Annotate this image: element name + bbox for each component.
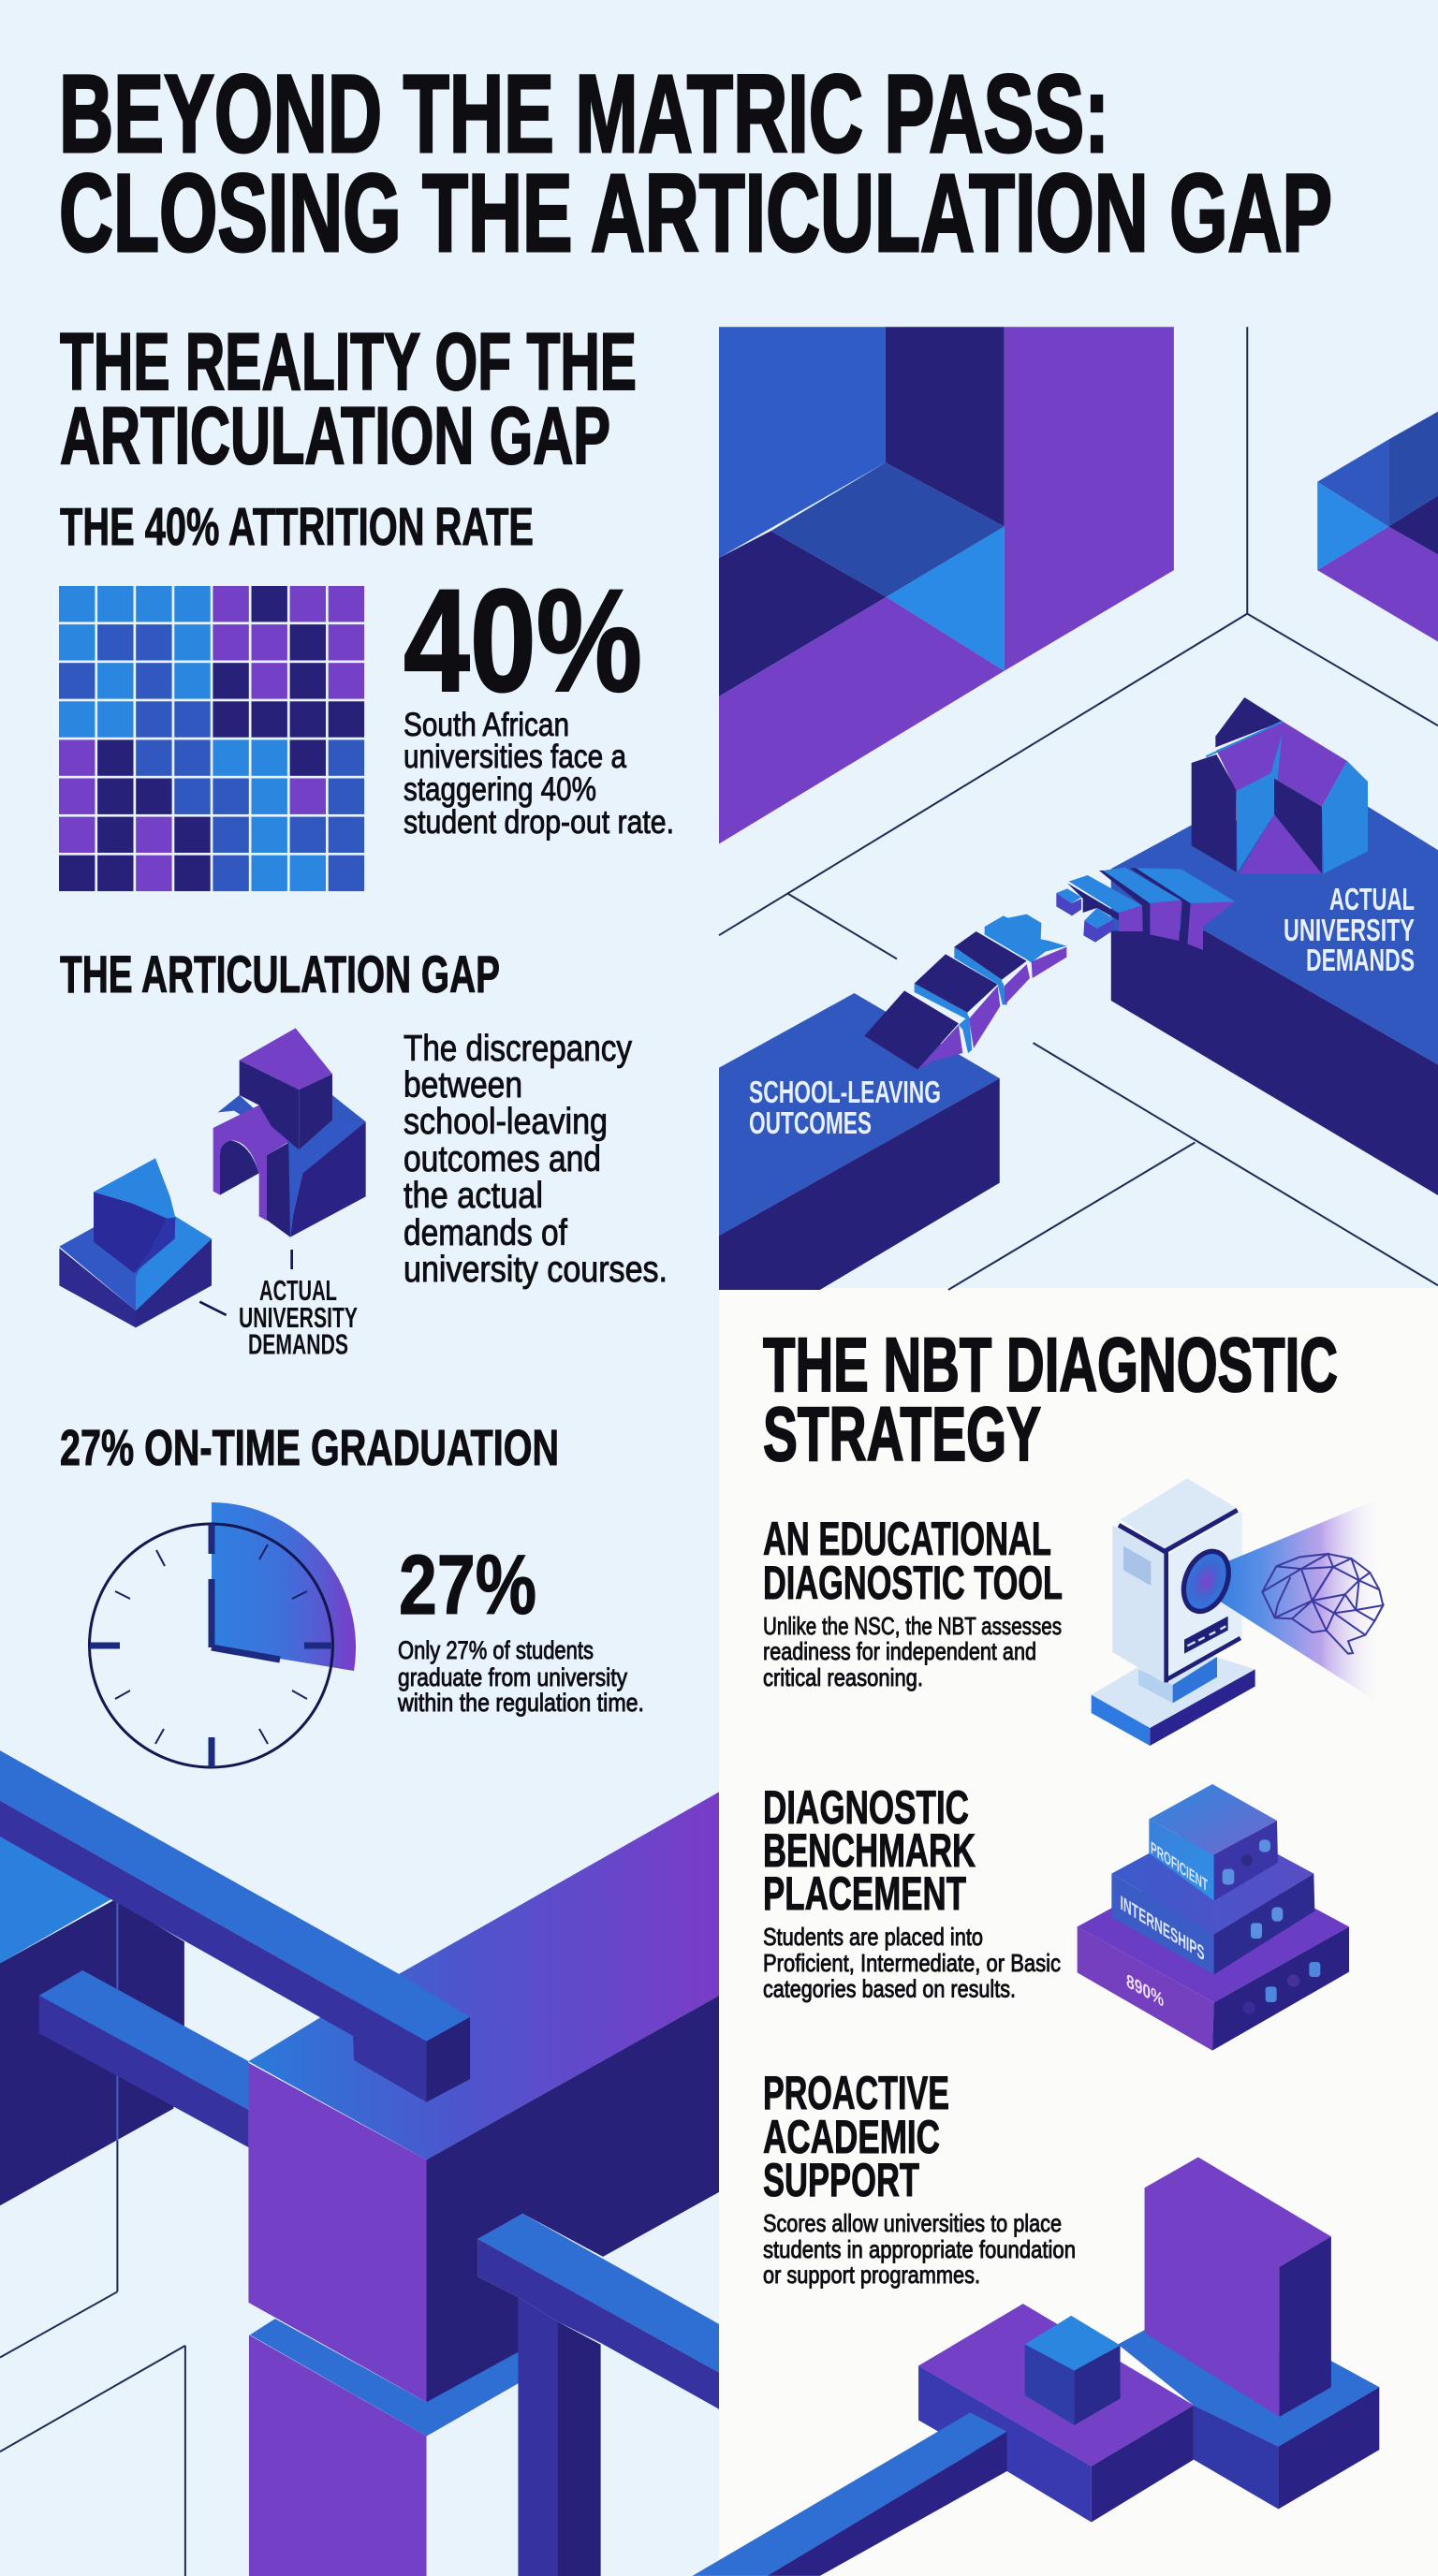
text block: 40% description: student drop-out rate. [404,804,674,841]
lens [1175,1544,1237,1617]
icon: school block [59,1158,212,1327]
icon: three tier benchmark pyramid [1078,1784,1349,2051]
broken bridge: school side [864,915,1066,1070]
text block: 27% description [397,1636,644,1717]
wedge [212,1502,356,1671]
text block: placement description: Proficient, Intermediate, or Basic [763,1949,1061,1977]
text block: NBT description: critical reasoning. [763,1663,923,1691]
clock face [90,1524,333,1767]
label: actual university demands: DEMANDS [248,1327,348,1361]
text block: placement description: Students are placed into [763,1923,983,1951]
heading: diagnostic benchmark placement: PLACEMENT [763,1867,966,1920]
illustration: isometric structure bottom left [0,1750,719,2576]
leader lines [199,1250,292,1315]
clock ticks [90,1524,332,1767]
text block: 27% description: Only 27% of students [398,1636,594,1664]
illustration: university building and broken bridge [864,697,1368,1070]
text block: 40% description [404,707,674,841]
school platform [719,993,1000,1290]
text block: 40% description: South African [404,707,569,743]
text block: 27% description: graduate from university [398,1663,627,1691]
large isometric block [719,327,1174,844]
heading: the reality of the articulation gap: ARTICULATION GAP [60,391,610,481]
beam [1214,1500,1378,1702]
broken bridge: university side [1056,868,1235,950]
text block: 40% description: universities face a [404,739,626,775]
label: actual university demands: UNIVERSITY [239,1301,358,1334]
machine base [1092,1645,1255,1746]
text block: placement description [763,1923,1061,2003]
waffle chart: 40% attrition [59,586,364,891]
text block: support description [763,2209,1076,2289]
label: actual university demands [239,1274,358,1361]
text block: discrepancy description: The discrepancy [404,1029,632,1069]
text block: NBT description [763,1612,1062,1691]
text block: discrepancy description: the actual [404,1176,543,1216]
subheading: the articulation gap: THE ARTICULATION GAP [60,944,500,1003]
text block: discrepancy description: school-leaving [404,1102,608,1142]
right edge block [1317,412,1438,642]
panel: NBT strategy background [719,1288,1438,2576]
heading: diagnostic benchmark placement: DIAGNOSTIC [763,1781,969,1834]
bottom tier [1078,1853,1349,2051]
text block: NBT description: readiness for independent and [763,1637,1036,1665]
text block: discrepancy description: outcomes and [404,1139,601,1179]
label: school-leaving outcomes: SCHOOL-LEAVING [749,1075,941,1109]
heading: diagnostic benchmark placement [763,1781,976,1920]
big number: 40%: 40% [404,560,642,723]
tier label: 890%: 890% [1126,1969,1164,2012]
machine body [1112,1478,1242,1683]
guide lines [719,327,1438,1290]
text block: 40% description: staggering 40% [404,771,596,808]
university building [1192,697,1368,873]
heading: proactive academic support: PROACTIVE [763,2067,949,2119]
small cube [1025,2316,1121,2425]
beam [693,2412,1007,2576]
heading: proactive academic support [763,2067,949,2206]
icon: scanner machine projecting to brain [1092,1478,1383,1746]
subheading: the 40% attrition rate: THE 40% ATTRITION RATE [60,497,534,557]
brain wireframe [1262,1554,1383,1654]
text block: placement description: categories based on results. [763,1975,1016,2003]
text block: 27% description: within the regulation time. [397,1689,644,1717]
tier label: internships: INTERNESHIPS [1120,1891,1204,1965]
heading: proactive academic support: SUPPORT [763,2154,919,2206]
label: actual university demands: ACTUAL [259,1274,337,1307]
big number: 27%: 27% [399,1539,536,1632]
label: school-leaving outcomes: OUTCOMES [749,1105,872,1140]
text block: NBT description: Unlike the NSC, the NBT assesses [763,1612,1062,1640]
illustration: isometric structure and platforms top right [719,327,1438,1290]
tall block [1145,2158,1331,2417]
text block: support description: students in appropriate foundation [763,2235,1076,2263]
tier label: proficient: PROFICIENT [1151,1838,1208,1896]
heading: the NBT diagnostic strategy [763,1323,1338,1477]
text block: discrepancy description: between [404,1065,522,1105]
heading: the reality of the articulation gap [60,317,637,481]
illustration: isometric support blocks with beam [693,2158,1379,2576]
title [59,52,1332,275]
text block: discrepancy description: demands of [404,1213,567,1253]
heading: an educational diagnostic tool: AN EDUCATIONAL [763,1513,1051,1565]
text block: discrepancy description [404,1029,668,1290]
heading: the NBT diagnostic strategy: STRATEGY [763,1392,1041,1477]
label: school-leaving outcomes [749,1075,941,1140]
icon: two isometric blocks showing the gap [59,1028,366,1327]
right base [1118,2330,1379,2509]
heading: an educational diagnostic tool [763,1513,1063,1609]
heading: diagnostic benchmark placement: BENCHMARK [763,1824,976,1877]
text block: support description: Scores allow universities to place [763,2209,1062,2237]
text block: support description: or support programmes. [763,2261,980,2289]
subheading: 27% on-time graduation: 27% ON-TIME GRADUATION [60,1420,559,1476]
left base [918,2304,1194,2523]
heading: proactive academic support: ACADEMIC [763,2111,940,2163]
heading: the reality of the articulation gap: THE REALITY OF THE [60,317,637,407]
middle tier [1111,1819,1314,1974]
top tier [1149,1784,1278,1901]
text block: discrepancy description: university courses. [404,1250,668,1290]
label: actual university demands on platform [1284,882,1415,977]
chart: clock with 27% wedge [90,1502,356,1767]
icon: university block with arch [213,1028,366,1237]
heading: an educational diagnostic tool: DIAGNOSTIC TOOL [763,1557,1063,1609]
university platform [1111,807,1438,1195]
